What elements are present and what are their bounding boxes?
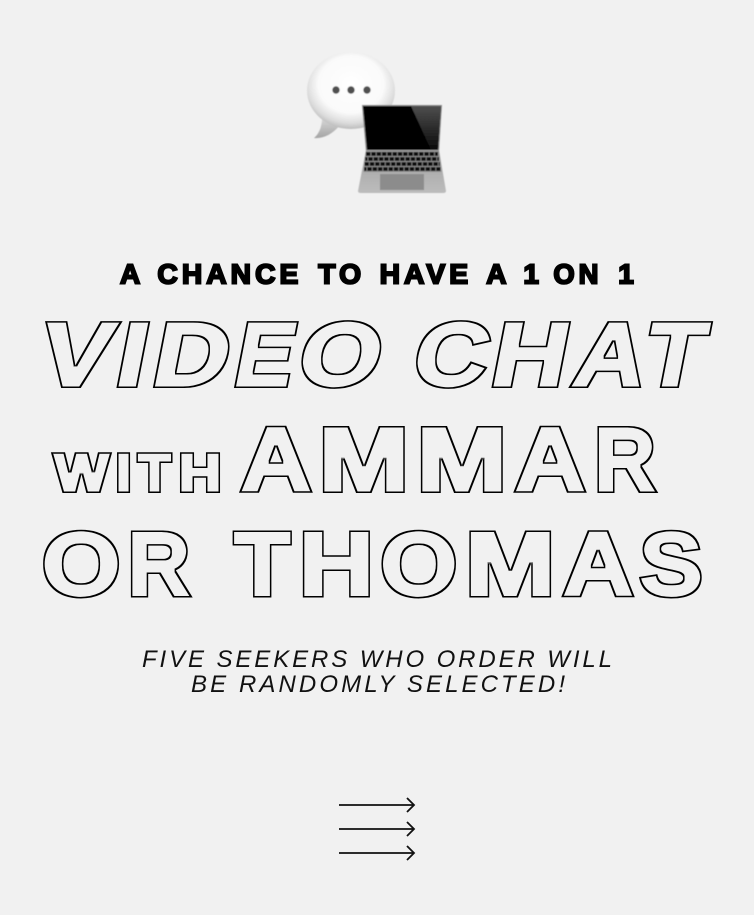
heading: or thomas: M bbox=[465, 515, 555, 615]
heading: ammar: M bbox=[319, 410, 409, 510]
heading: video chat: D bbox=[145, 305, 240, 405]
heading: or thomas: A bbox=[563, 515, 634, 615]
heading: ammar: A bbox=[240, 410, 312, 510]
heading: or thomas bbox=[42, 515, 703, 615]
heading: with: T bbox=[138, 444, 171, 502]
heading: with: I bbox=[116, 444, 131, 502]
heading: a chance to have a 1 on 1: A bbox=[486, 258, 509, 290]
heading: a chance to have a 1 on 1: 1 bbox=[618, 258, 638, 290]
heading: a chance to have a 1 on 1: HAVE bbox=[380, 258, 472, 290]
heading: ammar: M bbox=[417, 410, 507, 510]
heading: a chance to have a 1 on 1: CHANCE bbox=[157, 258, 302, 290]
heading: video chat: A bbox=[566, 305, 656, 405]
heading: ammar bbox=[240, 410, 656, 510]
heading: or thomas: O bbox=[380, 515, 458, 615]
heading: video chat: O bbox=[291, 305, 392, 405]
icon: speech bubble emoji bbox=[307, 52, 395, 138]
heading: or thomas: T bbox=[234, 515, 290, 615]
heading: with bbox=[54, 444, 221, 502]
heading: video chat: T bbox=[637, 305, 715, 405]
text: be randomly selected: BE RANDOMLY SELECTED! bbox=[191, 671, 565, 698]
text: five seekers who order will: FIVE SEEKERS WHO ORDER WILL bbox=[142, 646, 612, 673]
heading: a chance to have a 1 on 1: A bbox=[120, 258, 143, 290]
heading: video chat: H bbox=[484, 305, 578, 405]
heading: a chance to have a 1 on 1: 1 bbox=[523, 258, 543, 290]
heading: ammar: A bbox=[515, 410, 586, 510]
heading: ammar: R bbox=[594, 410, 656, 510]
heading: a chance to have a 1 on 1: ON bbox=[553, 258, 602, 290]
heading: or thomas: H bbox=[299, 515, 374, 615]
heading: with: H bbox=[179, 444, 221, 502]
heading: or thomas: O bbox=[42, 515, 121, 615]
heading: video chat: E bbox=[227, 305, 305, 405]
icon: laptop emoji bbox=[358, 105, 446, 193]
heading: or thomas: R bbox=[128, 515, 190, 615]
heading: with: W bbox=[54, 444, 110, 502]
heading: or thomas: S bbox=[639, 515, 703, 615]
heading: video chat: V bbox=[32, 305, 122, 405]
heading: video chat: I bbox=[109, 305, 158, 405]
heading: video chat bbox=[32, 305, 715, 405]
heading: video chat: C bbox=[406, 305, 499, 405]
heading: a chance to have a 1 on 1: TO bbox=[318, 258, 365, 290]
arrows: three right-pointing arrows bbox=[339, 798, 414, 860]
